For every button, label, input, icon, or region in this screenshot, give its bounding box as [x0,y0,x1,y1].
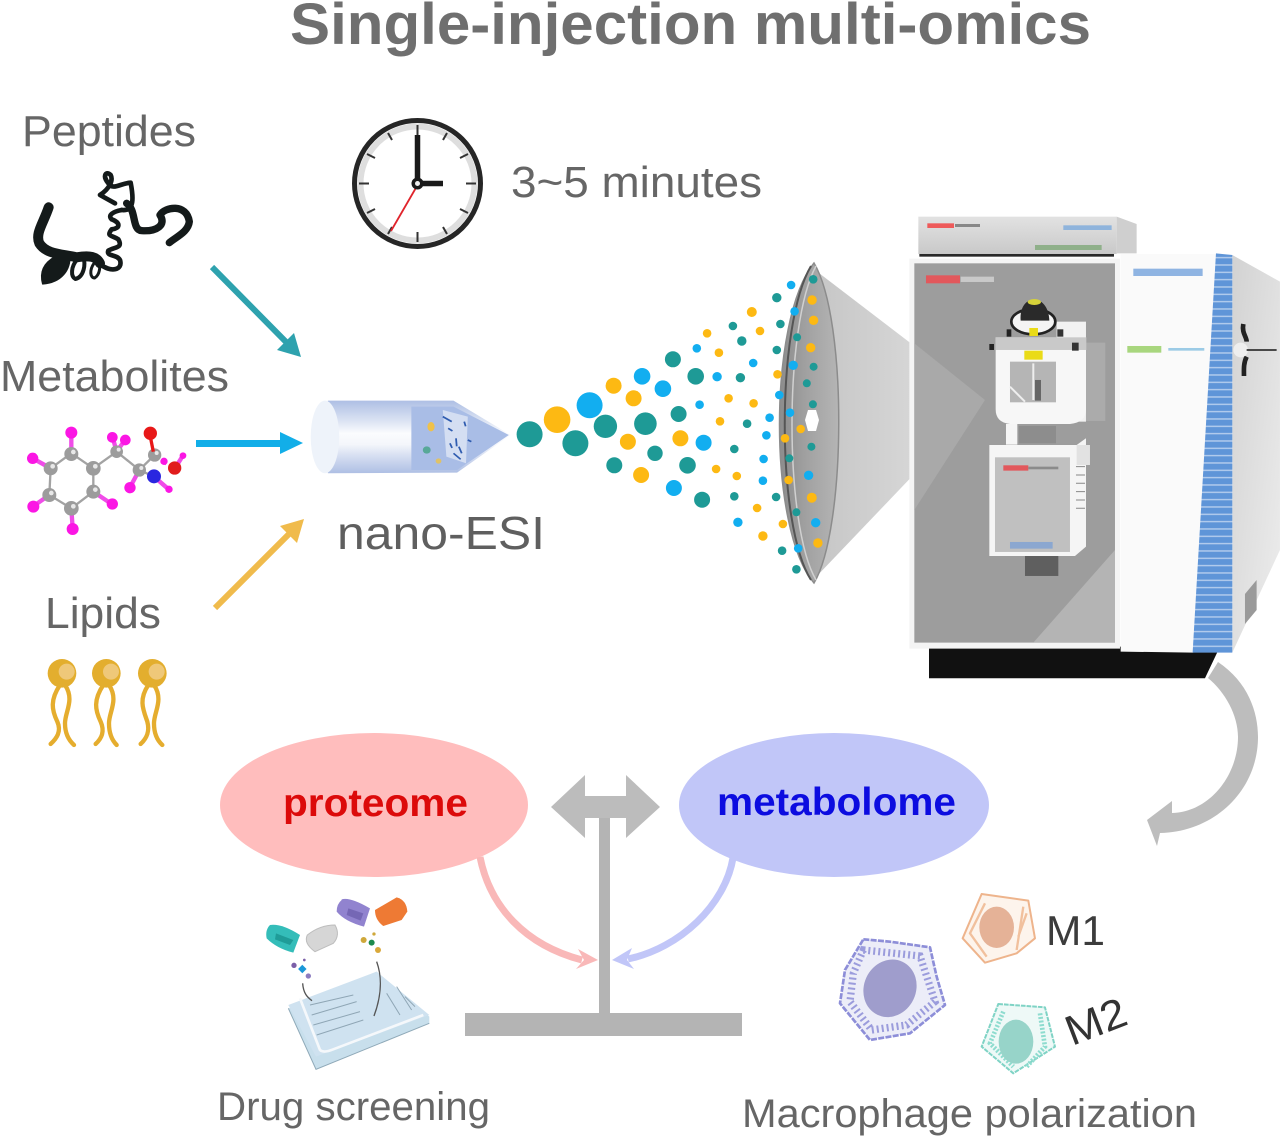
icon: ion lens disc [780,263,839,583]
label: drug screening: Drug screening [217,1085,490,1129]
teal droplets [517,275,818,574]
blue striped band [1193,253,1232,653]
arrow: double-headed gray arrow [551,775,660,838]
icon: nano-ESI capillary [311,401,511,473]
proteome ellipse: proteome [283,782,468,825]
front panel [909,259,1120,649]
M1 macrophage [963,894,1035,963]
ion spray droplets [517,275,823,574]
arrow: curved gray output arrow [1147,662,1258,846]
icon: mass spectrometer [909,217,1280,678]
label: peptides: Peptides [22,107,196,156]
white front door [1121,254,1217,653]
pills [266,897,407,953]
lower module [989,438,1090,576]
metabolome ellipse: metabolome [717,781,956,824]
icon: drug screening [266,897,429,1069]
ion source [989,299,1105,445]
blue droplets [577,281,820,553]
icon: metabolite molecule [27,427,186,535]
side panel [1232,255,1280,653]
label: lipids: Lipids [45,589,161,638]
label: nano-ESI: nano-ESI [337,507,545,559]
arrow: teal peptides arrow [212,267,301,357]
arrow: metabolome curve [612,858,733,969]
cone from lens to mass spectrometer [815,270,985,578]
lipid three [138,659,167,745]
metabolome ellipse [679,733,989,877]
lipid two [92,659,121,745]
icon: three lipids [48,659,167,745]
base [929,647,1220,678]
proteome ellipse [220,733,528,877]
side connector [1233,324,1277,376]
screening plate [288,972,429,1069]
label: M1: M1 [1046,907,1105,954]
arrow: yellow lipids arrow [215,519,304,608]
icon: peptide ribbon [38,173,189,284]
lipid one [48,659,76,745]
label: analysis time: 3~5 minutes [511,158,762,207]
particles and needles [291,932,381,1016]
arrow: proteome curve [480,857,598,969]
top unit [918,217,1137,257]
label: metabolites: Metabolites [0,352,229,401]
arrow: blue metabolites arrow [196,432,303,454]
yellow droplets [544,295,823,548]
icon: clock [354,120,480,246]
M2 macrophage [982,1004,1055,1073]
balance stand [465,818,742,1036]
label: M2: M2 [1058,988,1133,1054]
large macrophage [840,939,945,1040]
label: macrophage polarization: Macrophage polarization [742,1092,1197,1136]
icon: macrophage cells [840,894,1055,1073]
